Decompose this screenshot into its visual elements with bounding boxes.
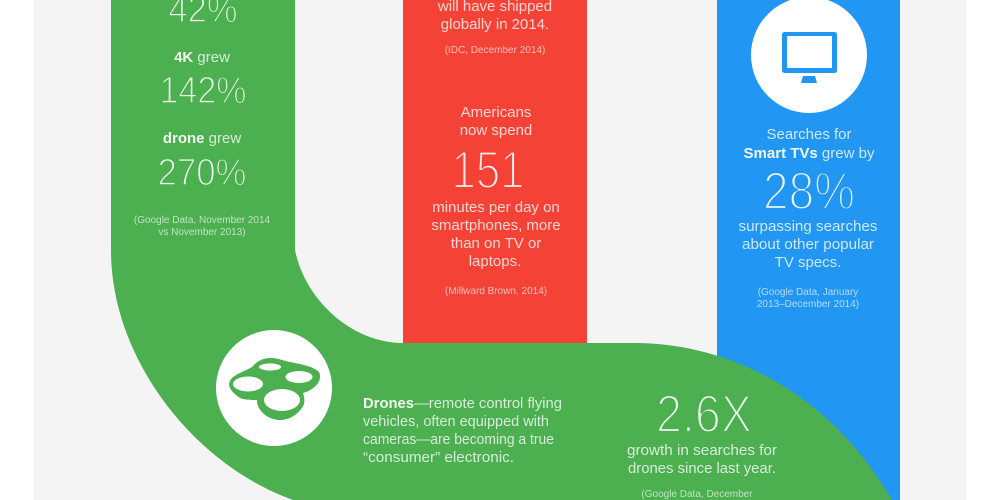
text: smart TV growth label: Smart TVs grew by — [744, 145, 875, 162]
text: drone search growth: growth in searches for — [627, 442, 777, 459]
text: Americans intro — [460, 104, 532, 139]
icon: drone — [216, 330, 332, 446]
text: drones description: “consumer” electronic. — [363, 449, 514, 466]
source: smart TV — [757, 287, 859, 310]
source: smart TV: (Google Data, January — [758, 287, 858, 298]
text: Americans intro: Americans — [461, 104, 531, 121]
text: drone search growth: drones since last year. — [628, 460, 776, 477]
stat: 270%: 270% — [158, 152, 246, 194]
text: drones description: cameras—are becoming a true — [363, 431, 554, 448]
text: smart TV description: about other popular — [742, 236, 874, 253]
source: IDC: (IDC, December 2014) — [445, 45, 545, 56]
text: smart TV description: surpassing searches — [738, 218, 878, 235]
stat: 2.6X: 2.6X — [656, 385, 752, 444]
panel: green drone ribbon — [111, 0, 892, 500]
text: 4K label: 4K grew — [174, 49, 230, 66]
source: smart TV: 2013–December 2014) — [757, 299, 859, 310]
text: smartphone description: laptops. — [469, 253, 521, 270]
icon: smart TV — [751, 0, 867, 113]
stat: 28%: 28% — [763, 162, 855, 221]
text: Americans intro: now spend — [460, 122, 532, 139]
text: smart TV intro: Searches for — [766, 126, 852, 143]
source: Millward Brown: (Millward Brown, 2014) — [445, 286, 547, 297]
stat: 142%: 142% — [160, 70, 246, 112]
text: shipments: globally in 2014. — [441, 16, 549, 33]
source: Google data November: vs November 2013) — [158, 227, 246, 238]
text: smartphone description: minutes per day on — [432, 199, 560, 216]
source: Google data November: (Google Data, November 2014 — [134, 215, 271, 226]
text: drone search growth — [627, 442, 777, 477]
stat: 151: 151 — [452, 141, 524, 200]
text: smart TV description: TV specs. — [775, 254, 841, 271]
text: smartphone description: smartphones, more — [431, 217, 561, 234]
text: smartphone description — [431, 199, 561, 270]
text: smartphone description: than on TV or — [451, 235, 541, 252]
text: drones description — [363, 395, 562, 466]
text: drone label: drone grew — [163, 130, 241, 147]
panel: red smartphone column — [403, 0, 587, 345]
text: drones description: Drones—remote control flying — [363, 395, 562, 412]
source: Google data December: (Google Data, December — [641, 489, 753, 500]
source: Google data November — [134, 215, 271, 238]
text: shipments — [437, 0, 552, 33]
text: drones description: vehicles, often equipped with — [363, 413, 549, 430]
text: smart TV description — [738, 218, 878, 271]
panel: blue smart TV column — [717, 0, 900, 500]
